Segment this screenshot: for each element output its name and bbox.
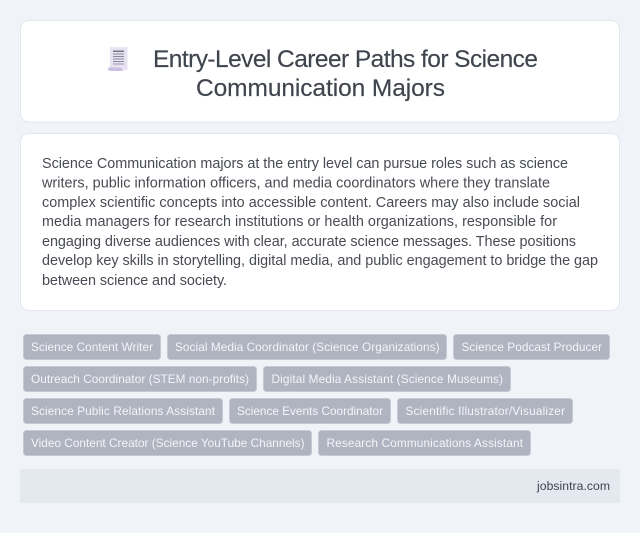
tag: Science Podcast Producer — [462, 340, 602, 354]
footer source text: jobsintra.com — [536, 479, 610, 493]
tag: Digital Media Assistant (Science Museums) — [272, 372, 503, 386]
tag: Science Public Relations Assistant — [31, 404, 216, 418]
tag — [24, 366, 256, 392]
text block: description: complex scientific concepts into accessible content. Careers may also include social — [42, 195, 580, 211]
text block: description: media managers for research institutions or health organizations, responsible for — [42, 214, 557, 230]
tag — [24, 334, 160, 360]
text block: description: between science and society. — [42, 273, 227, 289]
tag: Outreach Coordinator (STEM non-profits) — [31, 372, 249, 386]
tag — [230, 398, 390, 424]
text block: description — [41, 156, 598, 289]
tag — [398, 398, 572, 424]
tag: Scientific Illustrator/Visualizer — [406, 404, 565, 418]
text block: description: writers, public information officers, and media coordinators where they translate — [41, 176, 550, 192]
text block: description: engaging diverse audiences with clear, accurate science messages. These positions — [42, 234, 576, 250]
text block: description: develop key skills in storytelling, digital media, and public engagement to bridge the gap — [42, 253, 598, 269]
tag — [264, 366, 510, 392]
text block: description: Science Communication majors at the entry level can pursue roles such as science — [42, 156, 568, 172]
tag: Video Content Creator (Science YouTube Channels) — [31, 436, 305, 450]
tag — [24, 430, 312, 456]
tag — [24, 398, 222, 424]
tag — [168, 334, 446, 360]
tag: Science Events Coordinator — [237, 404, 383, 418]
title: Entry-Level Career Paths for Science — [153, 46, 538, 73]
tag — [318, 430, 530, 456]
panel: description card — [20, 134, 620, 310]
icon: document scroll — [108, 47, 128, 71]
tag: Social Media Coordinator (Science Organizations) — [175, 340, 440, 354]
tag: Science Content Writer — [31, 340, 153, 354]
title: Communication Majors — [196, 75, 445, 102]
tag — [454, 334, 610, 360]
panel: career tags — [24, 334, 610, 456]
footer — [20, 469, 620, 503]
tag: Research Communications Assistant — [326, 436, 524, 450]
title — [153, 46, 538, 102]
panel: header card — [20, 20, 620, 122]
